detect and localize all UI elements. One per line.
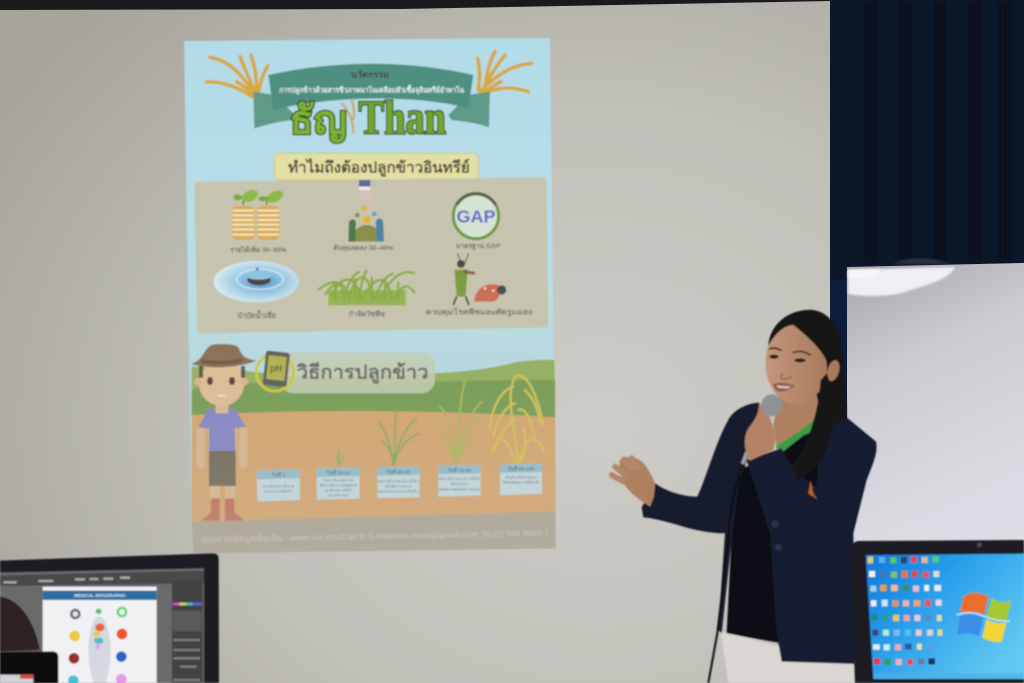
small foreground laptop [0, 651, 58, 683]
icon: pH phone: pH [270, 364, 282, 374]
footer contact: สอบถามข้อมูลเพิ่มเติม : www.scc.rmutt.ac.th E-mail:scc.rmutt@gmail.com Tel.02 549 4085-7 [201, 527, 550, 545]
heading text: ทำไมถึงต้องปลูกข้าวอินทรีย์ [288, 157, 470, 178]
laptop bezel [850, 540, 1024, 683]
method pill [280, 353, 435, 393]
farmer [191, 344, 257, 521]
logo text Thai: ธัญ [290, 98, 347, 143]
step card 4: เพื่อบำรุงรวง [450, 481, 469, 487]
step card 2 [317, 467, 360, 500]
right hand [745, 403, 775, 461]
screen workspace [0, 568, 204, 683]
label: wastewater: บำบัดน้ำเสีย [237, 309, 276, 320]
microphone stem [738, 415, 759, 477]
taskbar [873, 673, 1024, 679]
step card 5: เก็บเกี่ยวเมื่อข้าวสุกแก่ [505, 473, 537, 480]
icon: GAP badge [453, 193, 499, 239]
icon: GAP badge: GAP [456, 207, 495, 227]
step card 3: ป้องกันโรคและแมลงศัตรูข้าว [377, 489, 419, 494]
step card 2: ของต้นกล้า ครั้งที่ 1 [324, 488, 352, 493]
icon: pH phone [256, 351, 294, 391]
organs [93, 609, 105, 649]
bezel [0, 553, 219, 683]
curtain [830, 0, 1024, 420]
step card 5: วันที่ 90-120 [508, 464, 534, 472]
step card 3: วันที่ 45-50 [386, 468, 410, 476]
colour spectrum [173, 603, 201, 605]
poster wash overlay [184, 38, 556, 553]
rice stalks [207, 52, 532, 97]
artboard header [43, 591, 157, 600]
step card 2: เพื่อกระตุ้นการเจริญเติบโต [319, 483, 357, 489]
ribbon arch [268, 64, 473, 110]
step card 4: พ่นสารชีวภาพทางใบ ครั้งที่ 3 [439, 476, 480, 481]
logo wheat [342, 100, 354, 133]
benefits panel [194, 177, 548, 333]
soil [192, 411, 556, 522]
step card 4: เพิ่มคุณภาพเมล็ดข้าวสมบูรณ์ [438, 486, 480, 493]
neck and chest [773, 392, 821, 447]
lower scene [191, 344, 556, 553]
step card 5: ได้ผลผลิตคุณภาพดีเพิ่มขึ้น [501, 479, 541, 485]
label: pest control: ควบคุมโรคพืชและศัตรูแมลง [426, 306, 533, 317]
black blouse under collar [777, 415, 827, 488]
laptop right [850, 540, 1024, 683]
jacket left side and sleeve [642, 403, 759, 633]
face [766, 325, 827, 405]
step card 3: พ่นสารชีวภาพทางใบ ครั้งที่ 2 [378, 479, 419, 484]
poster background [184, 38, 556, 553]
ribbon subtitle: การปลูกข้าวด้วยสารชีวภาพนาโนเคลือบหัวเชื้อจุลินทรีย์อำพาโน [279, 83, 464, 95]
body figure [88, 617, 111, 683]
desktop monitor [0, 553, 219, 683]
step card 2: อย่างสม่ำเสมอ [328, 493, 349, 498]
ear [825, 359, 842, 382]
jacket right side and arm [747, 417, 877, 664]
step card 1: แช่เมล็ดในสารชีวภาพ [262, 483, 294, 489]
microphone cable [708, 475, 739, 683]
icon: water drop ripple [214, 261, 299, 302]
ribbon heading: นวัตกรรม [351, 69, 389, 79]
green collar [773, 415, 820, 453]
whiteboard [847, 258, 1024, 545]
facial features [769, 348, 811, 392]
step card 4: วันที่ 75-90 [447, 466, 471, 474]
icon: grasshopper and ladybug [453, 253, 506, 305]
hills [192, 360, 555, 417]
ribbon tails [253, 92, 295, 128]
presenter [612, 310, 877, 683]
footer band [192, 512, 556, 553]
hair back [768, 310, 847, 487]
method heading: วิธีการปลูกข้าว [296, 362, 428, 385]
label: income: รายได้เพิ่ม 30–50% [230, 244, 287, 254]
step card 3: เพื่อเพิ่มการแตกกอ [385, 484, 412, 489]
rice growth stages [276, 376, 544, 468]
person head [0, 597, 40, 652]
icon: coins and seedlings [232, 187, 285, 240]
step card 2: พ่นสารชีวภาพทางใบ [323, 478, 353, 483]
toolbar [0, 571, 204, 586]
desktop wallpaper [866, 554, 1024, 679]
logo text Latin: Than [359, 92, 446, 144]
step card 5 [500, 464, 542, 495]
step card 1 [257, 469, 300, 502]
jacket buttons [771, 520, 782, 551]
banner and title [194, 52, 548, 333]
step card 1: ก่อนหว่านเมล็ดข้าว [264, 488, 292, 494]
label: weeds: กำจัดวัชพืช [348, 310, 385, 319]
heading pill [274, 153, 478, 180]
infographic icons [68, 607, 127, 683]
artboard title: MEDICAL INFOGRAPHIC [74, 593, 126, 599]
step card 4 [438, 465, 481, 497]
desktop icons [868, 556, 942, 665]
black inner top [727, 457, 800, 643]
poster projection [184, 38, 556, 553]
label: GAP standard: มาตรฐาน GAP [456, 243, 501, 251]
step card 2: วันที่ 15-20 [327, 469, 350, 477]
top dark ceiling strip [0, 0, 832, 10]
label: cost: ต้นทุนลดลง 30–40% [333, 243, 393, 252]
icon: money bag [348, 180, 384, 242]
trousers [721, 632, 857, 683]
laptop camera [977, 543, 982, 547]
left hand [612, 457, 655, 507]
windows logo [957, 593, 1012, 642]
hair front lock [792, 373, 833, 482]
microphone head [761, 394, 782, 416]
icon: weeds [318, 270, 415, 305]
step card 1: วันที่ 1 [271, 471, 285, 479]
orange badge [808, 481, 817, 499]
palette panel [172, 581, 203, 683]
artboard [43, 587, 157, 683]
step card 3 [377, 466, 420, 498]
